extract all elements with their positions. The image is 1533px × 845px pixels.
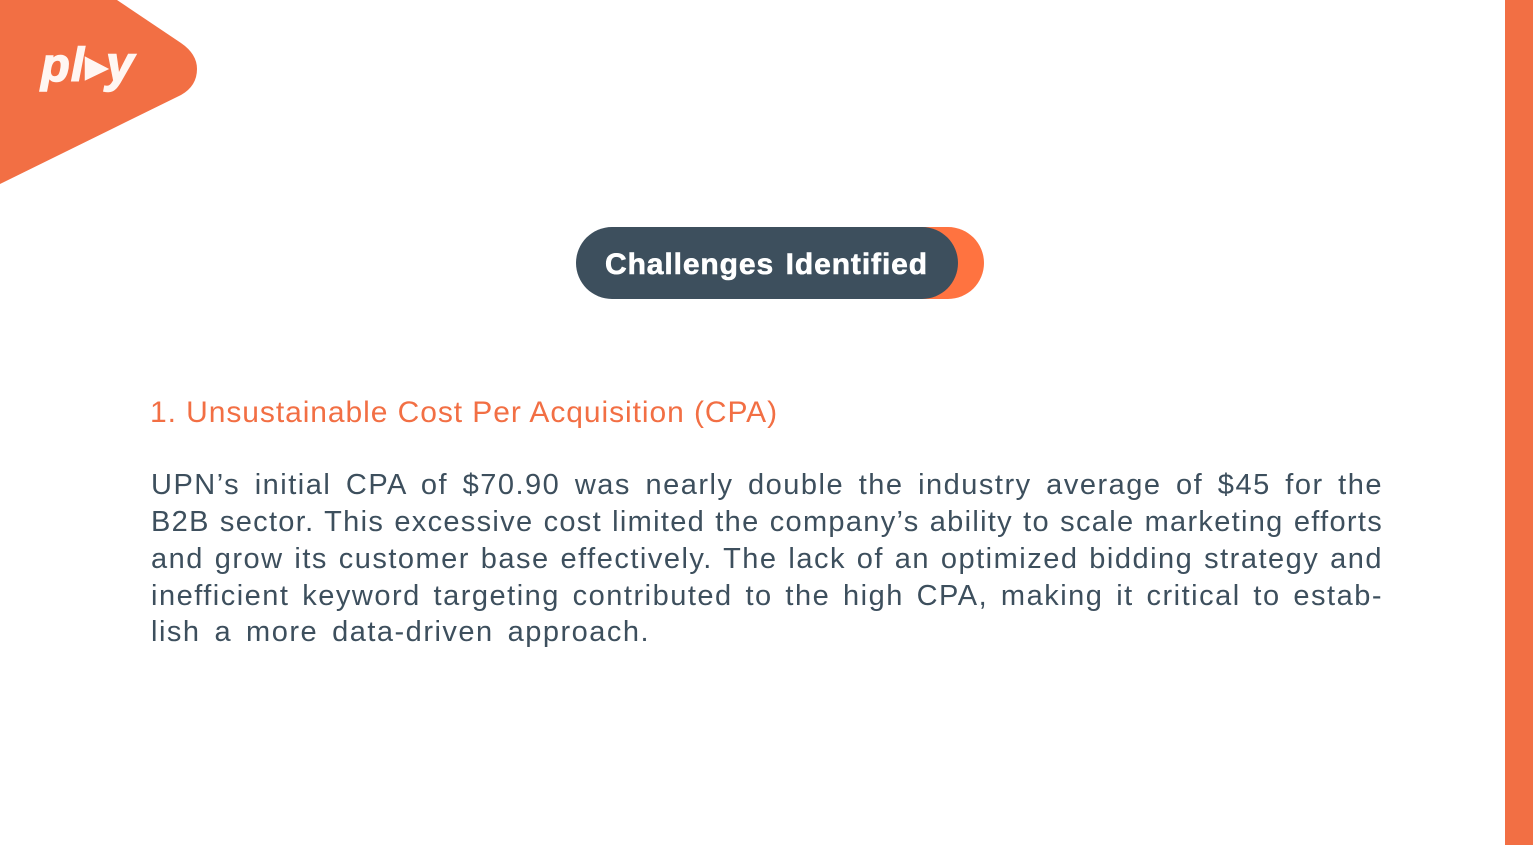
pill orange shadow — [626, 227, 984, 299]
pill dark front with title — [576, 227, 958, 299]
body paragraph: inefficient keyword targeting contributed to the high CPA, making it critical to estab- — [151, 580, 1383, 612]
subheading: 1. Unsustainable Cost Per Acquisition (CPA) — [150, 396, 778, 429]
logo wordmark: y — [103, 36, 136, 92]
right accent bar — [1505, 0, 1533, 845]
logo wordmark — [39, 36, 136, 92]
pill dark front with title: Challenges Identified — [605, 248, 928, 281]
body paragraph: UPN’s initial CPA of $70.90 was nearly double the industry average of $45 for the — [151, 469, 1383, 501]
body paragraph: and grow its customer base effectively. The lack of an optimized bidding strategy and — [151, 543, 1383, 575]
logo wordmark: p — [39, 38, 70, 91]
logo wordmark: l — [71, 38, 85, 91]
body paragraph: lish a more data-driven approach. — [151, 616, 650, 648]
body paragraph: B2B sector. This excessive cost limited the company’s ability to scale marketing efforts — [151, 506, 1383, 538]
logo: play badge — [0, 0, 197, 184]
heading pill — [576, 227, 984, 299]
body paragraph — [151, 469, 1383, 648]
